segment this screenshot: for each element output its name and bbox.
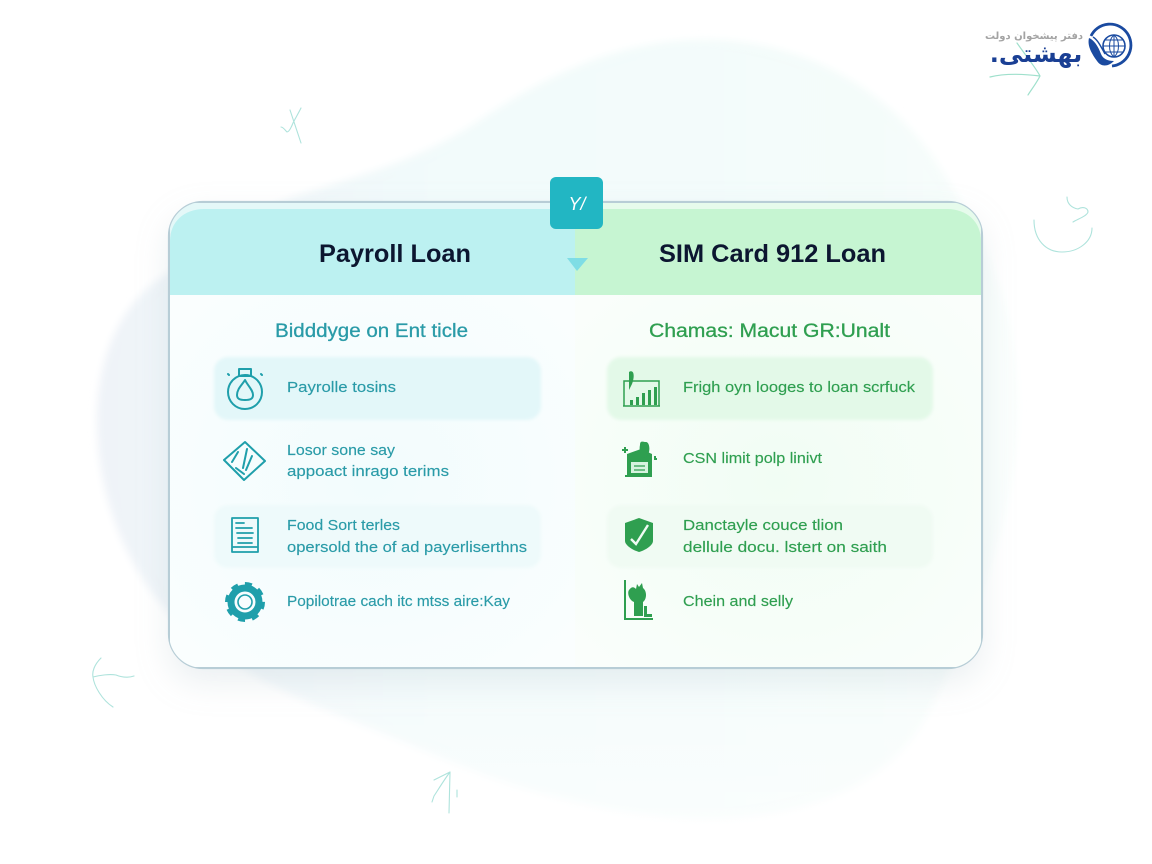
- left row 3: Food Sort terles: [287, 517, 400, 534]
- right row 4: [624, 580, 794, 620]
- icon: tilted document: [224, 442, 265, 480]
- divider arrow: [567, 258, 588, 271]
- heading: SIM Card 912 Loan: SIM Card 912 Loan: [659, 240, 886, 268]
- right row 3: Danctayle couce tlion: [683, 517, 843, 534]
- icon: form sheet: [232, 518, 258, 552]
- left row 3: [214, 505, 541, 568]
- left row 3: opersold the of ad payerliserthns: [287, 539, 527, 556]
- left row 1: [214, 357, 541, 420]
- icon: bar chart: [623, 371, 660, 406]
- decorative scribble: right circle: [1034, 197, 1092, 252]
- left row 4: Popilotrae cach itc mtss aire:Kay: [287, 593, 511, 610]
- heading: Payroll Loan: Payroll Loan: [319, 240, 471, 268]
- icon: gear: [227, 584, 263, 620]
- icon: stopwatch bag: [228, 369, 262, 409]
- right row 3: [607, 505, 933, 568]
- left row 2: [224, 442, 449, 480]
- right column background: [575, 295, 981, 667]
- subheading left: Bidddyge on Ent ticle: [275, 321, 468, 342]
- left row 2: appoact inrago terims: [287, 463, 449, 480]
- decorative scribble: bottom left: [93, 658, 134, 707]
- right row 1: [607, 357, 933, 420]
- left column background: [170, 295, 575, 667]
- decorative scribble: bottom centre: [432, 772, 457, 813]
- versus badge: [550, 177, 603, 229]
- icon: plant chart: [624, 580, 653, 620]
- right row 1: Frigh oyn looges to loan scrfuck: [683, 379, 916, 396]
- left row 4: [227, 584, 511, 620]
- blob lower fade: [90, 660, 1030, 835]
- comparison card: [169, 202, 982, 668]
- logo tagline: دفتر پیشخوان دولت: [985, 31, 1083, 42]
- right header band: [575, 209, 981, 295]
- right row 4: Chein and selly: [683, 593, 794, 610]
- card base: [169, 202, 982, 668]
- right row 2: CSN limit polp linivt: [683, 450, 823, 467]
- icon: shield check: [625, 518, 653, 552]
- decorative scribble: top left: [281, 108, 301, 143]
- right top highlight strip: [575, 203, 981, 233]
- left row 1: Payrolle tosins: [287, 379, 396, 396]
- logo: [985, 24, 1131, 95]
- subheading right: Chamas: Macut GR:Unalt: [649, 321, 891, 342]
- left top highlight strip: [170, 203, 575, 233]
- right row 2: [622, 442, 823, 477]
- right row 3: dellule docu. lstert on saith: [683, 539, 887, 556]
- versus badge: Y/: [568, 194, 587, 214]
- background blob: [97, 40, 1018, 819]
- logo arrow scribble: [990, 43, 1040, 95]
- left header band: [170, 209, 575, 295]
- logo wordmark: بهشتی.: [990, 40, 1082, 68]
- left row 2: Losor sone say: [287, 442, 396, 459]
- logo emblem: [1089, 24, 1131, 66]
- icon: house with leaf: [622, 442, 657, 477]
